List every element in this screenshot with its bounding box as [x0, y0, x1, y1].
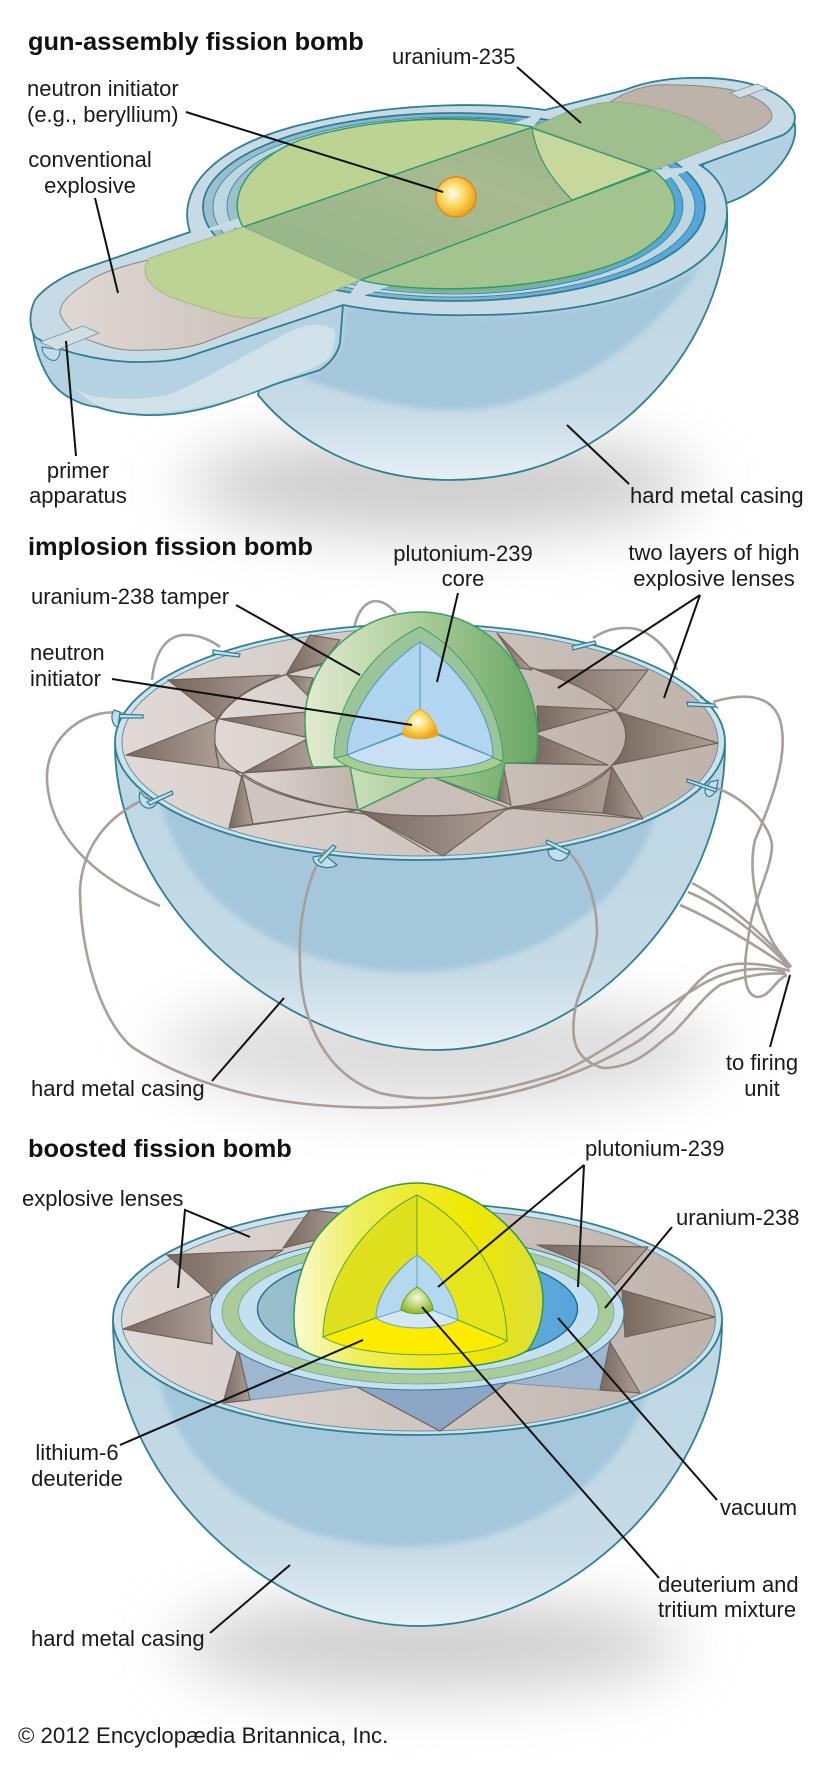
deuterium and tritium mixture core [401, 1287, 433, 1314]
panel: implosion fission bomb [28, 533, 800, 1108]
label: deuterium and tritium mixture: deuterium and [658, 1572, 799, 1597]
neutron initiator sphere [436, 177, 476, 217]
leader lines [112, 593, 790, 1081]
top rim face [30, 78, 795, 362]
rim [113, 1203, 722, 1435]
plutonium-239 core [347, 642, 493, 770]
label: lithium-6 deuteride: lithium-6 [35, 1440, 119, 1465]
conventional explosive left [60, 260, 270, 350]
label: neutron initiator: (e.g., beryllium) [27, 102, 179, 127]
heading: boosted fission bomb: boosted fission bomb [28, 1135, 292, 1163]
uranium-235 slug [145, 227, 360, 318]
copyright: © 2012 Encyclopædia Britannica, Inc. [18, 1723, 388, 1748]
neutron initiator core [403, 709, 438, 739]
plutonium-239 inner core [376, 1255, 458, 1328]
label: hard metal casing: hard metal casing [31, 1626, 205, 1651]
label: lithium-6 deuteride: deuteride [31, 1466, 123, 1491]
primer apparatus left [40, 326, 99, 360]
cylinder below rings [210, 1316, 623, 1431]
conventional explosive right [610, 85, 772, 143]
primer apparatus right [730, 84, 767, 98]
panel: boosted fission bomb [22, 1135, 800, 1693]
label: conventional explosive: conventional [28, 147, 152, 172]
concentric rings [203, 113, 705, 301]
label: plutonium-239 core: plutonium-239 [393, 541, 533, 566]
label: neutron initiator: initiator [30, 666, 101, 691]
dark lens facets [126, 633, 718, 856]
hard metal casing hemisphere [114, 744, 726, 1051]
label: vacuum: vacuum [720, 1495, 797, 1520]
label: explosive lenses: explosive lenses [22, 1186, 183, 1211]
rim [115, 624, 725, 860]
leader lines [66, 67, 629, 484]
panel: gun-assembly fission bomb [27, 28, 804, 535]
shadow below implosion bomb [160, 995, 720, 1105]
heading: gun-assembly fission bomb: gun-assembly fission bomb [28, 28, 364, 56]
lithium-6 deuteride sphere [294, 1183, 543, 1369]
lens facets [123, 1210, 715, 1431]
barrel underside right [702, 118, 795, 203]
uranium-235 disc [237, 119, 675, 289]
barrel highlight [73, 324, 335, 413]
leader lines [120, 1165, 717, 1633]
inner lens ellipse [214, 655, 626, 817]
hard metal casing bowl [258, 200, 727, 480]
label: two layers of high explosive lenses: two layers of high [628, 540, 800, 565]
heading: implosion fission bomb: implosion fission bomb [28, 533, 313, 561]
label: to firing unit: to firing [726, 1050, 798, 1075]
shadow below gun-assembly bomb [185, 435, 695, 535]
label: neutron initiator: neutron [30, 640, 105, 665]
label: to firing unit: unit [744, 1076, 780, 1101]
tamper lower band [335, 755, 503, 778]
label: deuterium and tritium mixture: tritium mixture [658, 1597, 796, 1622]
rear wires [47, 601, 791, 968]
explosive lens disc [122, 628, 718, 856]
label: plutonium-239 core: core [442, 566, 484, 591]
barrel underside left [33, 305, 343, 415]
uranium-238 tamper shell [305, 612, 538, 810]
front wires [80, 697, 791, 1108]
label: primer apparatus: primer [47, 458, 109, 483]
label: hard metal casing: hard metal casing [630, 483, 804, 508]
label: plutonium-239: plutonium-239 [585, 1136, 724, 1161]
shadow below boosted bomb [175, 1597, 685, 1693]
hard metal casing hemisphere [112, 1321, 723, 1627]
label: uranium-235: uranium-235 [392, 44, 516, 69]
label: uranium-238 tamper: uranium-238 tamper [31, 584, 229, 609]
label: two layers of high explosive lenses: explosive lenses [633, 566, 795, 591]
ring stack [210, 1236, 624, 1390]
label: conventional explosive: explosive [44, 173, 136, 198]
label: primer apparatus: apparatus [29, 483, 127, 508]
rim band across rings [198, 112, 700, 304]
label: uranium-238: uranium-238 [676, 1205, 800, 1230]
label: hard metal casing: hard metal casing [31, 1076, 205, 1101]
label: neutron initiator: neutron initiator [27, 76, 179, 101]
blue clips on rim [112, 641, 718, 868]
uranium-235 target [532, 102, 723, 200]
disc underside [238, 124, 672, 292]
explosive lens disc [122, 1209, 716, 1431]
